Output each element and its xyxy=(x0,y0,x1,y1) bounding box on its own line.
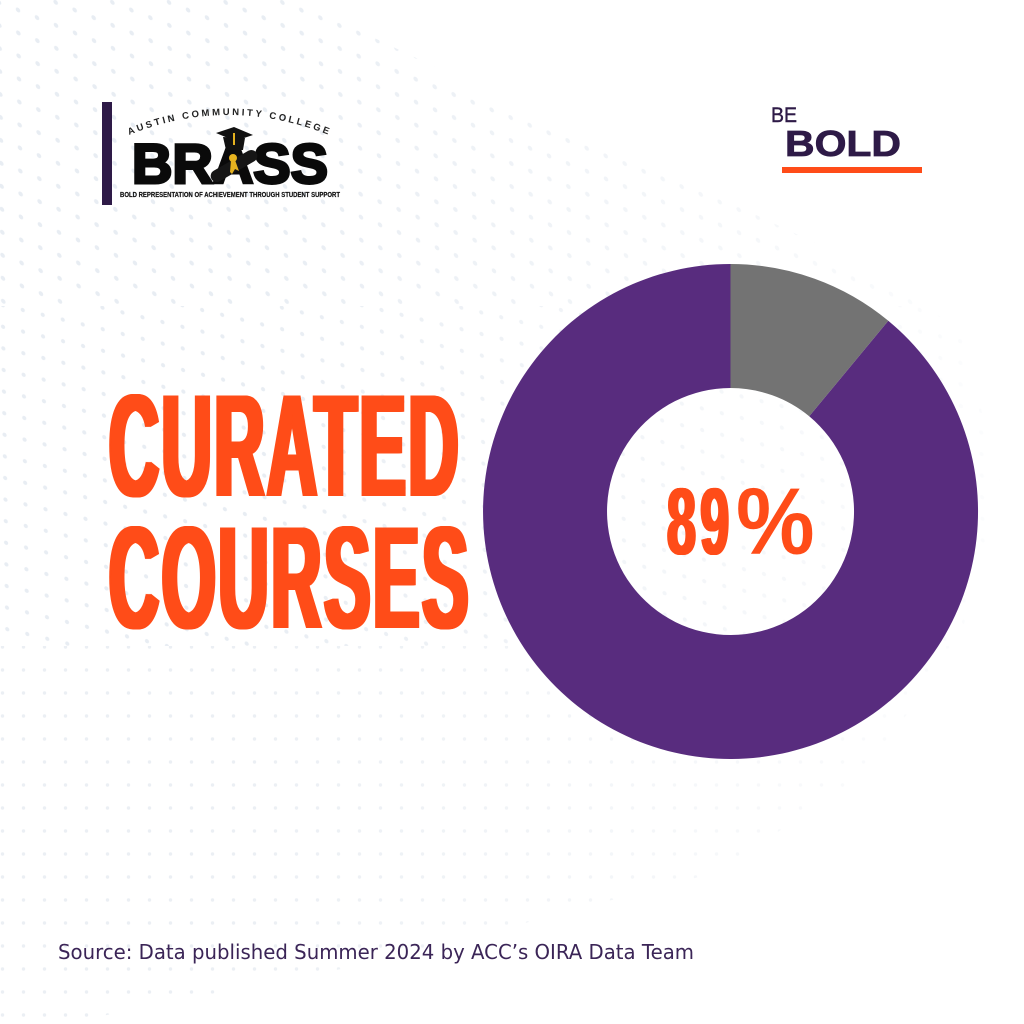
donut chart: 89% curated courses xyxy=(483,264,978,759)
value digits: 89 xyxy=(667,469,734,575)
icon: diploma scroll with ribbon xyxy=(208,148,260,184)
orange underline xyxy=(782,167,922,173)
Be Bold mark xyxy=(771,104,922,173)
logo tagline: BOLD REPRESENTATION OF ACHIEVEMENT THROUGH STUDENT SUPPORT xyxy=(120,192,341,199)
text: BOLD: BOLD xyxy=(785,123,901,164)
center value: 89% xyxy=(667,469,815,575)
logo divider bar xyxy=(102,102,112,205)
source note: Source: Data published Summer 2024 by ACC’s OIRA Data Team xyxy=(58,940,694,964)
logo wordmark BRASS: BRASS xyxy=(132,132,328,195)
title line 1: CURATED xyxy=(109,364,461,527)
icon: graduation cap xyxy=(216,127,253,150)
percent sign: % xyxy=(736,469,815,575)
logo arc text: AUSTIN COMMUNITY COLLEGE xyxy=(129,108,330,135)
donut segment: 11% gray xyxy=(730,264,888,416)
logo: Austin Community College BRASS xyxy=(102,102,341,205)
donut segment: 89% purple xyxy=(483,264,978,759)
title: Curated Courses xyxy=(109,364,471,659)
text: BE: BE xyxy=(771,104,797,127)
title line 2: COURSES xyxy=(109,496,471,659)
background dot pattern xyxy=(0,0,814,1016)
